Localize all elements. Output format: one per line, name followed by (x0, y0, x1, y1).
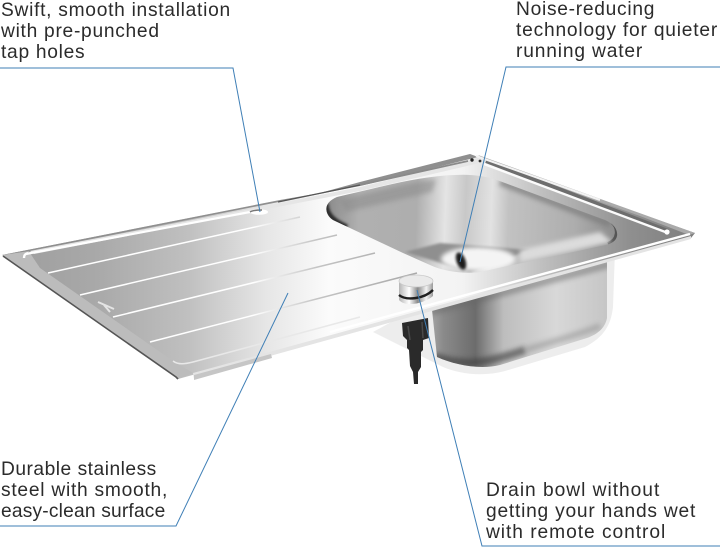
callout: drain bowl (417, 290, 720, 546)
callout: noise reduction: technology for quieter (516, 20, 718, 41)
callout: durable steel: easy-clean surface (1, 501, 166, 522)
callout: durable steel: Durable stainless (1, 459, 157, 480)
callout: durable steel: steel with smooth, (1, 480, 168, 501)
bowl exterior (373, 250, 615, 375)
callout: tap holes: with pre-punched (0, 21, 160, 42)
tap hole (250, 209, 268, 215)
remote control button (399, 275, 433, 304)
callout: durable steel (0, 293, 288, 526)
logo marks (98, 302, 114, 312)
callout: tap holes (0, 0, 260, 212)
black waste connector (402, 318, 429, 384)
callout: drain bowl: with remote control (485, 522, 666, 543)
callout: tap holes: tap holes (1, 42, 85, 63)
front lip (193, 236, 691, 379)
deck plate (2, 154, 695, 379)
right rim groove (478, 155, 695, 235)
callout: noise reduction: running water (516, 41, 643, 62)
callout: drain bowl: Drain bowl without (486, 480, 660, 501)
basin (326, 175, 617, 273)
sink illustration (2, 154, 695, 384)
callout: tap holes: Swift, smooth installation (1, 0, 231, 21)
back rim (2, 154, 478, 255)
drain grooves (48, 217, 417, 342)
callout: drain bowl: getting your hands wet (486, 501, 696, 522)
callout: noise reduction (460, 0, 720, 262)
left frame strip (2, 250, 193, 379)
